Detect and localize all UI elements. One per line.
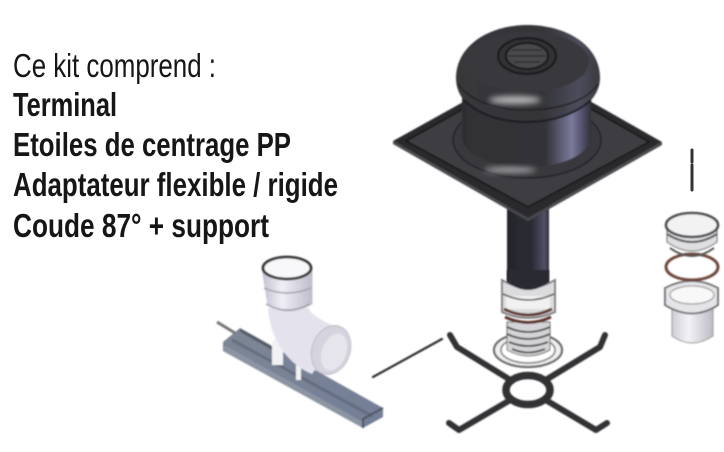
intro line: Ce kit comprend :	[13, 47, 216, 84]
red seal rings	[504, 309, 552, 322]
item: Coude 87° + support: Coude 87° + support	[13, 207, 269, 244]
neck base highlight	[484, 167, 536, 173]
upper ring	[667, 225, 717, 251]
pipe	[507, 205, 549, 288]
item: Adaptateur flexible / rigide: Adaptateur flexible / rigide	[13, 166, 338, 203]
cap top vent	[498, 38, 556, 74]
flange	[494, 333, 562, 367]
icon: screw	[690, 150, 694, 190]
elbow top ring	[263, 257, 311, 279]
icon: centring fittings below pipe	[494, 270, 562, 367]
lower adapter	[507, 322, 550, 356]
icon: terminal with flashing plate and pipe	[393, 25, 662, 288]
cap	[456, 25, 600, 122]
support rail	[217, 322, 383, 428]
icon: centring star	[449, 335, 607, 430]
neck	[462, 95, 591, 167]
elbow bracket	[272, 340, 301, 380]
icon: adapter flexible to rigid	[665, 213, 718, 343]
icon: loose rod	[373, 339, 442, 377]
elbow outlet	[268, 308, 342, 374]
item: Terminal: Terminal	[13, 86, 117, 123]
elbow socket	[262, 268, 312, 311]
lower socket	[665, 281, 718, 314]
lower cylinder	[672, 305, 713, 343]
flashing plate	[393, 66, 662, 221]
icon: 87 degree elbow on support rail	[217, 257, 383, 428]
pipe end	[507, 270, 549, 290]
item: Etoiles de centrage PP: Etoiles de centrage PP	[13, 126, 291, 163]
upper collar	[502, 280, 555, 318]
red seal ring	[666, 254, 718, 280]
heading: kit contents list	[13, 47, 338, 244]
